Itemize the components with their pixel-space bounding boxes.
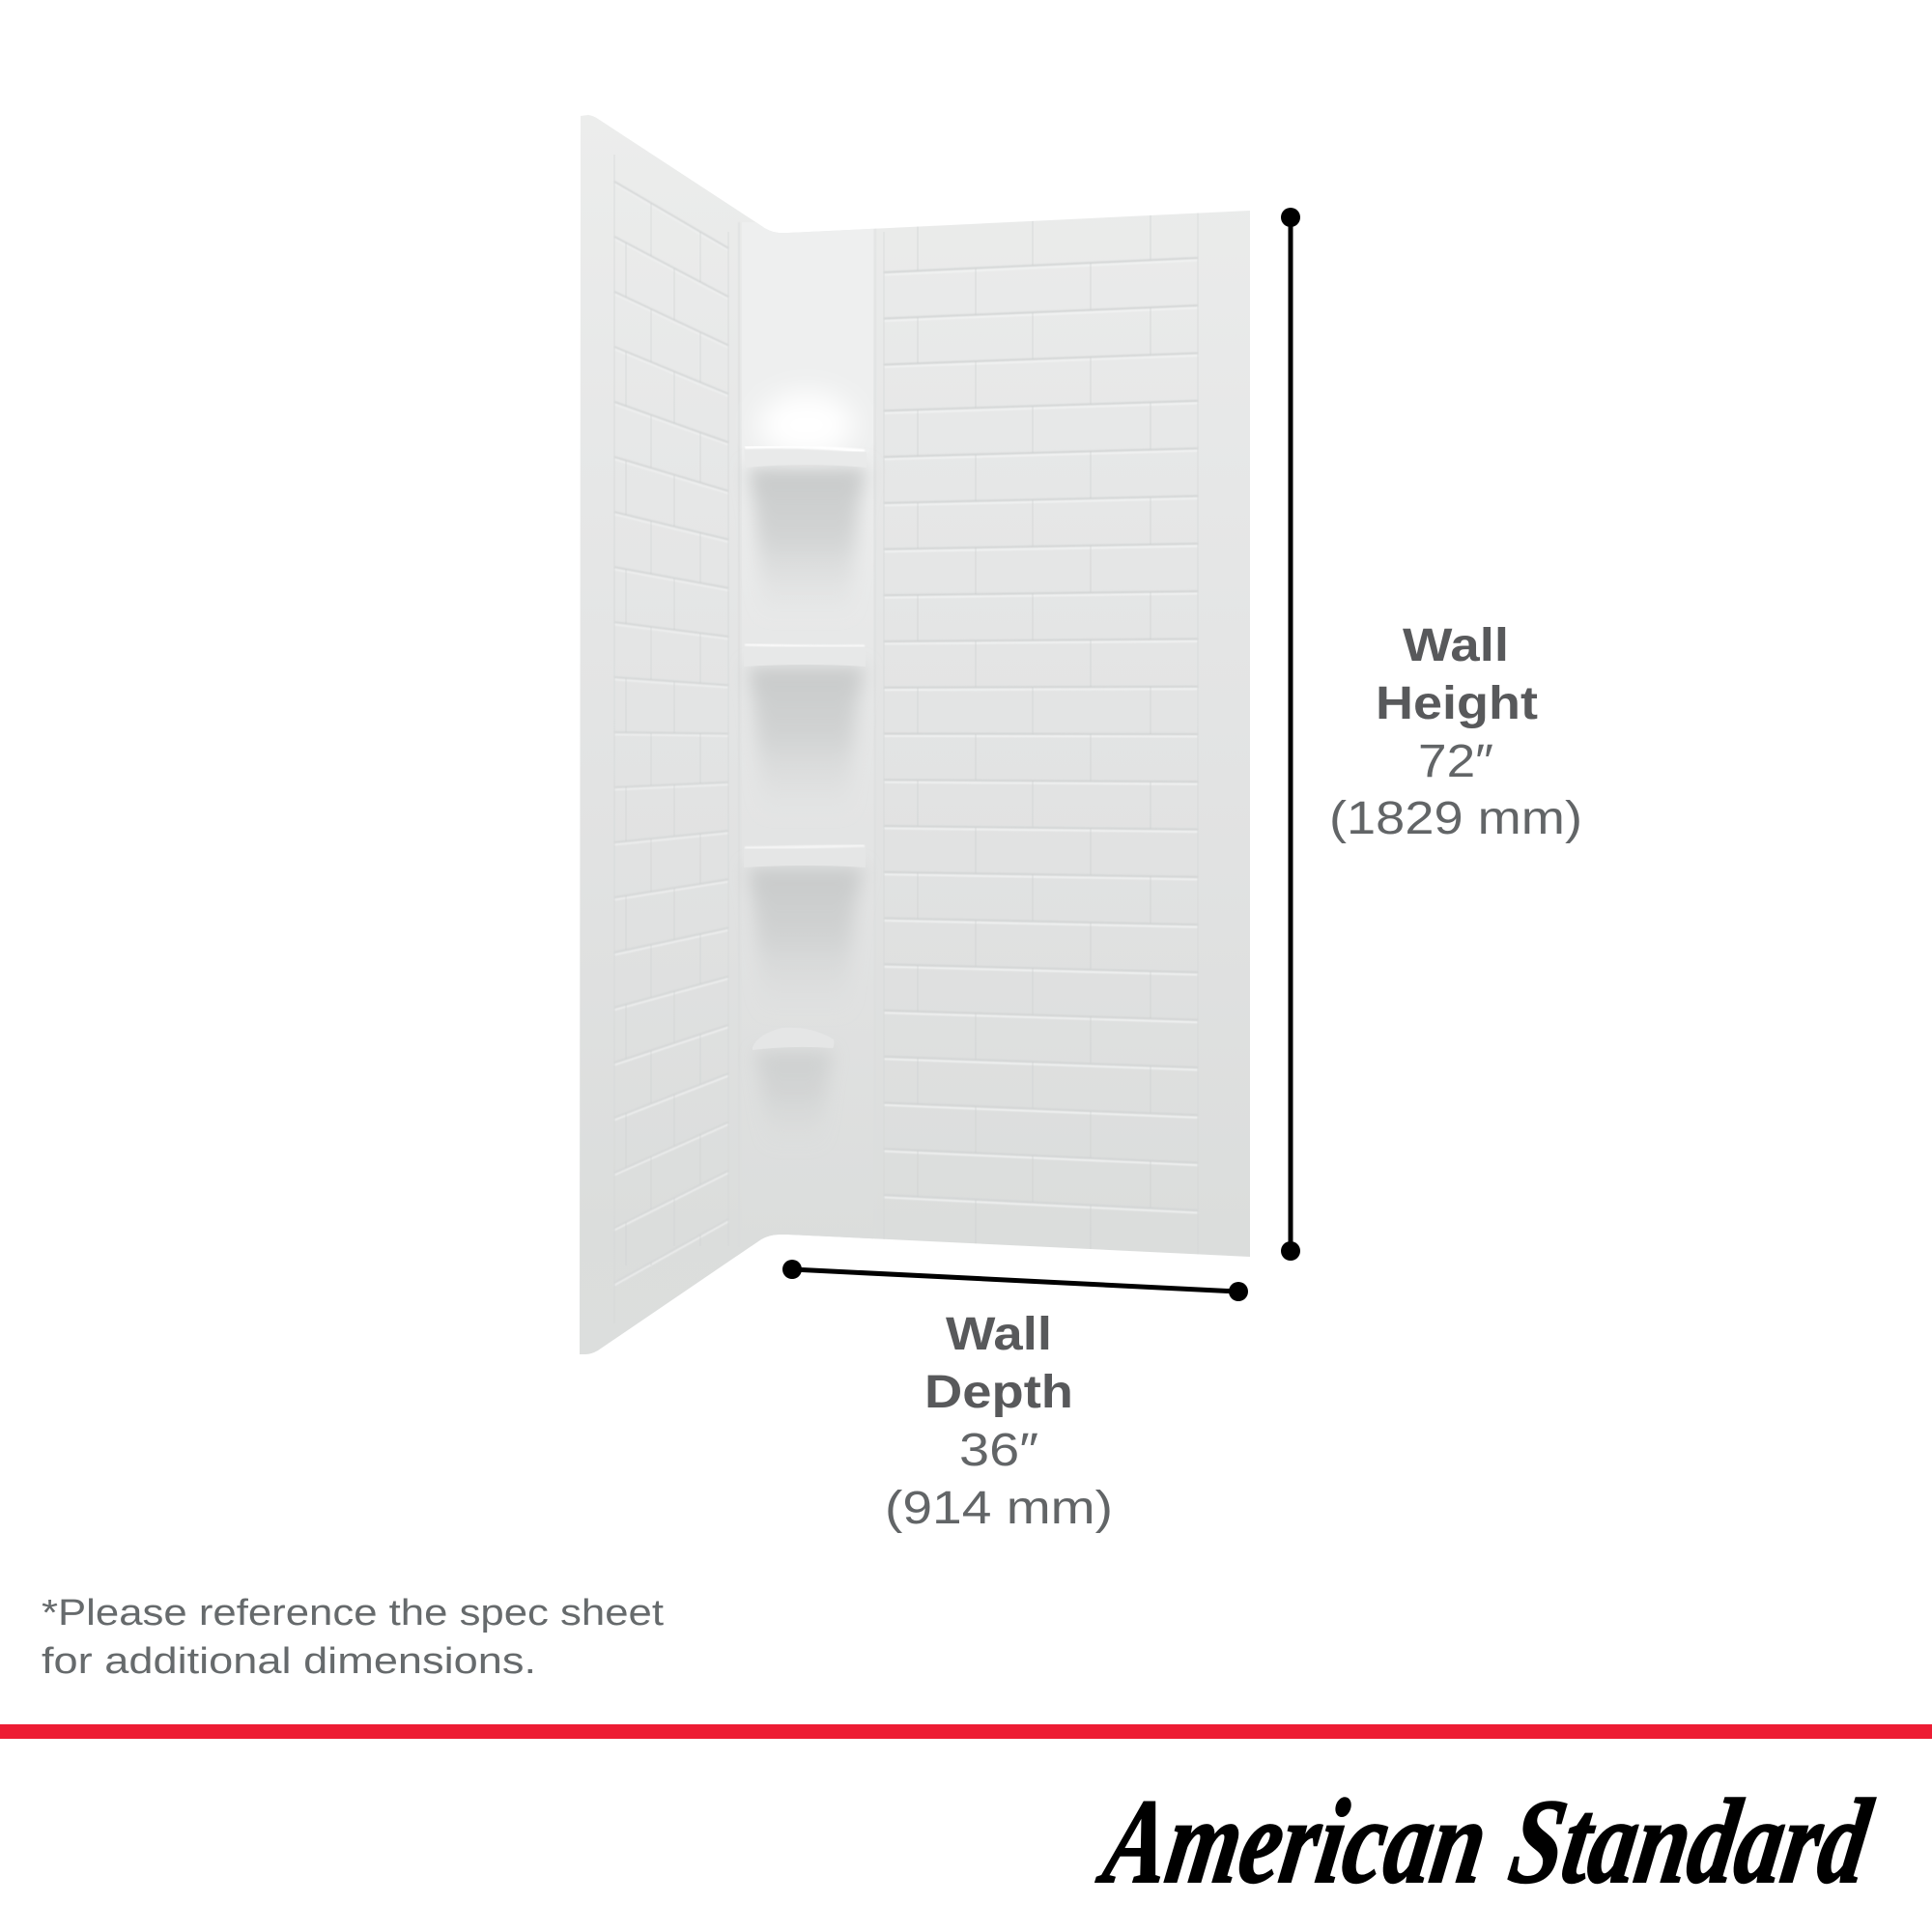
- label: wall height: Height: [1376, 678, 1538, 729]
- label: wall depth: [885, 1309, 1113, 1534]
- logo: American Standard: American: [1091, 1776, 1495, 1909]
- label: wall depth: Wall: [946, 1309, 1052, 1360]
- label: wall height: 72″: [1418, 736, 1493, 787]
- right wall tile grooves: [884, 211, 1198, 1256]
- label: wall depth: 36″: [959, 1425, 1038, 1476]
- shelf 1: [744, 446, 869, 582]
- wall silhouette: [580, 115, 1250, 1354]
- footnote: for additional dimensions.: [42, 1641, 536, 1682]
- footnote: [42, 1593, 665, 1682]
- shower wall panels: [580, 115, 1250, 1354]
- label: wall height: [1329, 620, 1582, 844]
- red divider bar: [0, 1724, 1932, 1739]
- shelf 2: [745, 643, 867, 773]
- shelf 3: [745, 844, 865, 966]
- footnote: *Please reference the spec sheet: [42, 1593, 665, 1634]
- corner column with shelves: [738, 222, 876, 1246]
- label: wall height: Wall: [1403, 620, 1509, 671]
- label: wall height: (1829 mm): [1329, 793, 1582, 844]
- logo: American Standard: [1091, 1776, 1880, 1909]
- dimension line: wall depth: [782, 1260, 1248, 1301]
- left wall tile grooves: [614, 155, 728, 1323]
- shelf 4: [759, 1051, 829, 1106]
- dimension line: wall height: [1281, 208, 1300, 1261]
- label: wall depth: (914 mm): [885, 1483, 1113, 1534]
- label: wall depth: Depth: [924, 1367, 1073, 1418]
